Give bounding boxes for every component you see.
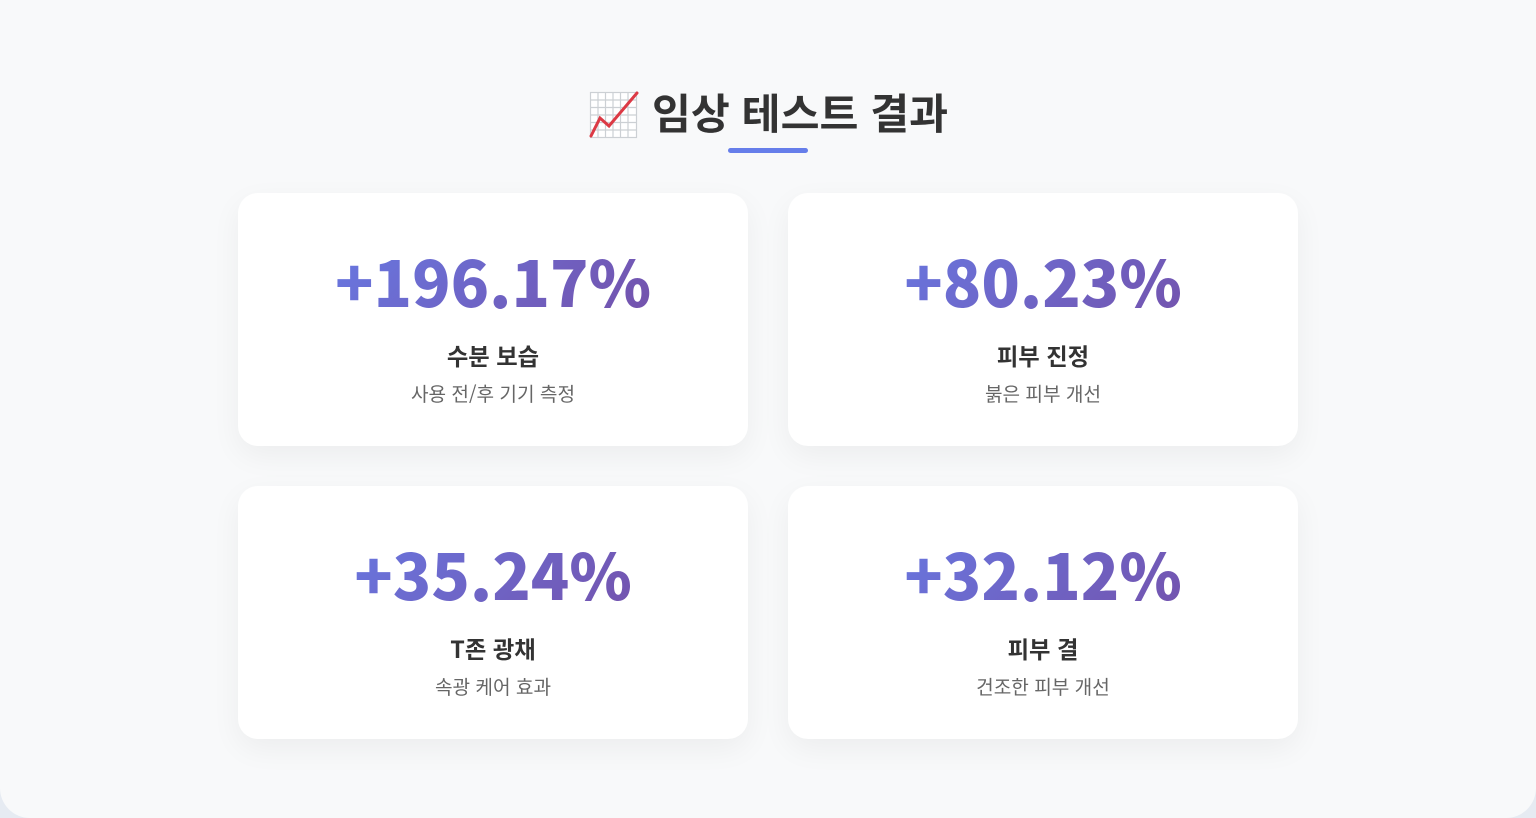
panel: soothing card bbox=[788, 193, 1298, 446]
stat description: 사용 전/후 기기 측정 bbox=[411, 379, 575, 407]
title: 임상 테스트 결과 bbox=[652, 80, 948, 142]
stat value: +196.17% bbox=[335, 235, 651, 326]
stat value bbox=[278, 529, 708, 619]
stat label: 피부 결 bbox=[1008, 631, 1078, 665]
stat description: 건조한 피부 개선 bbox=[976, 672, 1110, 700]
stat value: +32.12% bbox=[904, 528, 1182, 619]
stat value bbox=[828, 236, 1258, 326]
stat label: T존 광채 bbox=[450, 631, 536, 665]
title underline bbox=[728, 148, 808, 153]
stat value: +80.23% bbox=[904, 235, 1182, 326]
stat label: 수분 보습 bbox=[447, 338, 539, 372]
panel: T-zone card bbox=[238, 486, 748, 739]
stat description: 붉은 피부 개선 bbox=[985, 379, 1101, 407]
stat value bbox=[828, 529, 1258, 619]
panel: moisture card bbox=[238, 193, 748, 446]
panel: skin texture card bbox=[788, 486, 1298, 739]
stat description: 속광 케어 효과 bbox=[435, 672, 551, 700]
stat label: 피부 진정 bbox=[997, 338, 1089, 372]
icon: chart increasing bbox=[589, 91, 639, 138]
stat value: +35.24% bbox=[354, 528, 632, 619]
